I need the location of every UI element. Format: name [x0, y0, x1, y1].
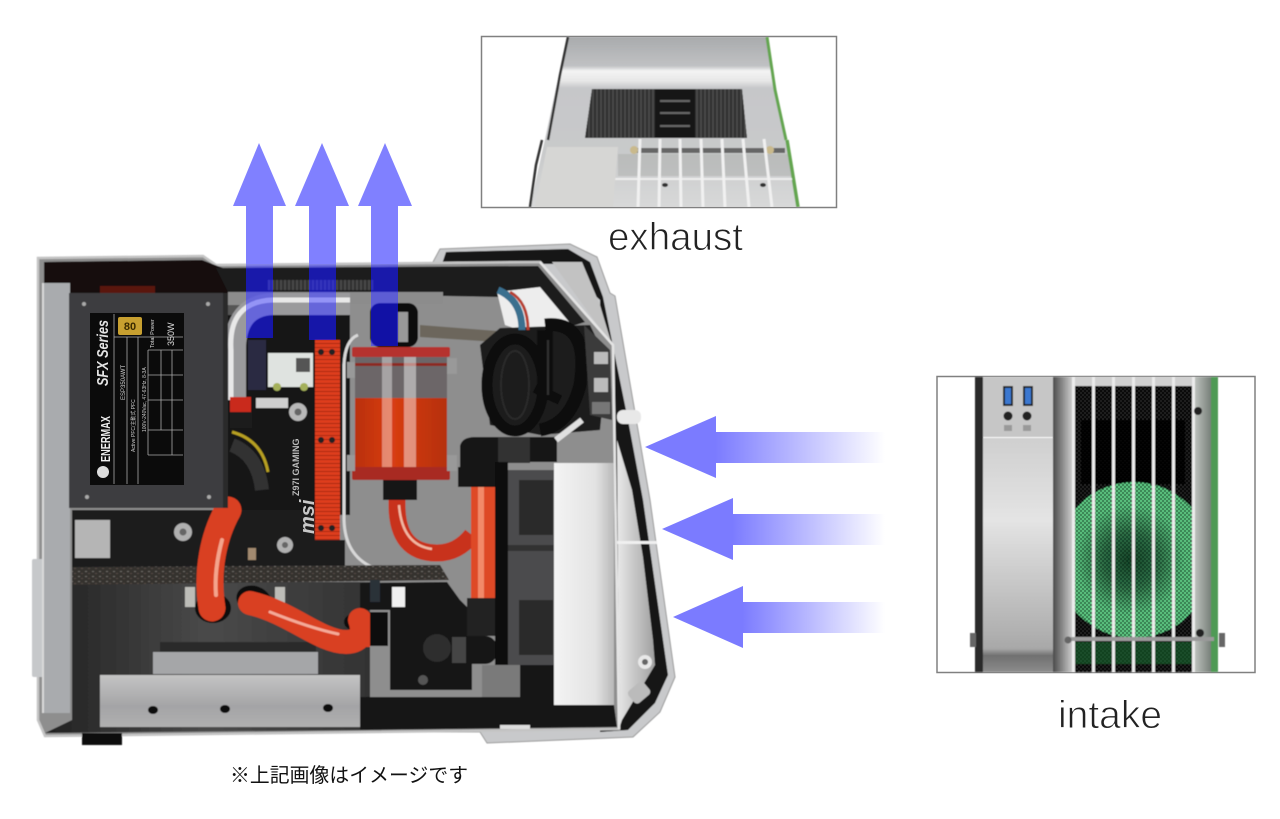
left silver bracket: [32, 559, 46, 677]
heading: exhaust: exhaust: [608, 216, 743, 259]
up arrow 1: [233, 143, 286, 338]
motherboard branding: Z97I GAMING: [291, 438, 301, 496]
up arrow 2: [295, 143, 349, 340]
PSU: [69, 293, 228, 508]
shell inner wing upper: [552, 262, 612, 345]
white cable bundle: [497, 287, 580, 342]
led strip: [420, 325, 497, 342]
left silver bar: [43, 283, 70, 713]
motherboard branding: msi: [297, 499, 319, 534]
rear IO: [75, 520, 110, 558]
photo: open PC case interior: [32, 244, 675, 745]
shell black channel: [442, 249, 668, 732]
black cables: [480, 290, 607, 435]
black fittings: [360, 437, 557, 685]
fan assembly: [508, 470, 555, 665]
hdd cages: [100, 642, 360, 727]
intake arrow 1: [645, 416, 885, 478]
connector boards: [584, 325, 612, 420]
PSU label: 100V-240Vac, 47-63Hz, 8-3A: [142, 367, 148, 432]
red tubes: [195, 510, 376, 642]
board chips: [248, 340, 266, 390]
motherboard branding: [291, 438, 319, 534]
top dark band: [216, 266, 585, 330]
case foot: [82, 733, 122, 745]
intake photo panel: [937, 376, 1255, 672]
motherboard upper: [228, 315, 350, 515]
wifi card: [256, 353, 313, 408]
red fitting and cables: [230, 397, 268, 490]
bottom dark floor: [360, 665, 617, 730]
PSU label: 80: [124, 321, 136, 333]
inner wall: [540, 262, 619, 729]
PSU label: ESP350AWT: [121, 365, 127, 400]
top left dark bay: [44, 260, 228, 296]
PSU label: Total Power: [150, 319, 156, 348]
shell inner wing lower: [617, 440, 655, 729]
exhaust photo panel: [482, 36, 836, 208]
red heatsink: [315, 340, 340, 540]
up arrow 3: [358, 143, 412, 346]
PSU label: ENERMAX: [98, 416, 113, 462]
radiator white panel: [554, 463, 614, 705]
note text: ※上記画像はイメージです: [230, 765, 468, 787]
case interior base: [38, 256, 619, 736]
lower motherboard: [72, 510, 315, 570]
vertical red tube: [471, 485, 495, 599]
silver tube: [231, 300, 350, 400]
PSU label: SFX Series: [95, 320, 112, 386]
intake arrow 3: [673, 586, 885, 648]
PSU label: 350W: [166, 322, 176, 346]
lower motherboard right: [315, 540, 345, 570]
PSU label: Active PFC/主動式 PFC: [130, 399, 137, 452]
case outer shell: [433, 244, 675, 743]
intake arrow 2: [662, 498, 885, 560]
heading: intake: intake: [1058, 694, 1162, 737]
PSU label: [90, 313, 184, 485]
u tube: [397, 485, 472, 553]
reservoir: [347, 303, 457, 500]
lower bay: [45, 582, 370, 733]
graphics card strip: [72, 565, 449, 585]
